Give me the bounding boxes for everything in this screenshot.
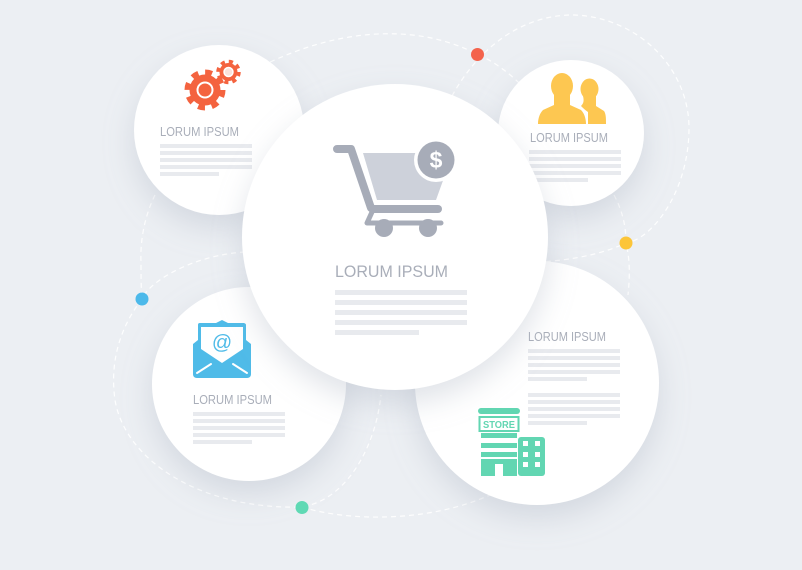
node: blue dot — [136, 292, 148, 306]
text lines: top-right — [529, 150, 621, 182]
icon: store building — [478, 408, 545, 476]
heading: top-left: LORUM IPSUM — [160, 125, 239, 139]
icon: store building: STORE — [483, 419, 515, 431]
icon: shopping cart with dollar — [337, 138, 458, 237]
panel: top-left gears circle — [134, 45, 304, 215]
text lines: bottom-left — [193, 412, 285, 444]
icon: email envelope — [193, 320, 251, 378]
heading: central: LORUM IPSUM — [335, 262, 448, 281]
icon: people — [538, 73, 606, 124]
icon: shopping cart with dollar: $ — [430, 147, 443, 173]
panel: bottom-right store circle — [415, 261, 659, 505]
panel: central cart circle — [242, 84, 548, 390]
node: yellow dot — [620, 236, 632, 250]
icon: email envelope: @ — [212, 332, 232, 354]
panel: top-right people circle — [498, 60, 644, 206]
icon: gears — [188, 62, 238, 108]
heading: bottom-right: LORUM IPSUM — [528, 330, 606, 344]
heading: bottom-left: LORUM IPSUM — [193, 393, 272, 407]
node: green dot — [296, 501, 308, 514]
node: red dot — [471, 48, 484, 61]
text lines: central — [335, 290, 467, 335]
text lines: bottom-right — [528, 349, 620, 425]
text lines: top-left — [160, 144, 252, 176]
dashed connector lines — [114, 15, 689, 517]
panel: bottom-left email circle — [152, 287, 346, 481]
heading: top-right: LORUM IPSUM — [530, 131, 608, 145]
